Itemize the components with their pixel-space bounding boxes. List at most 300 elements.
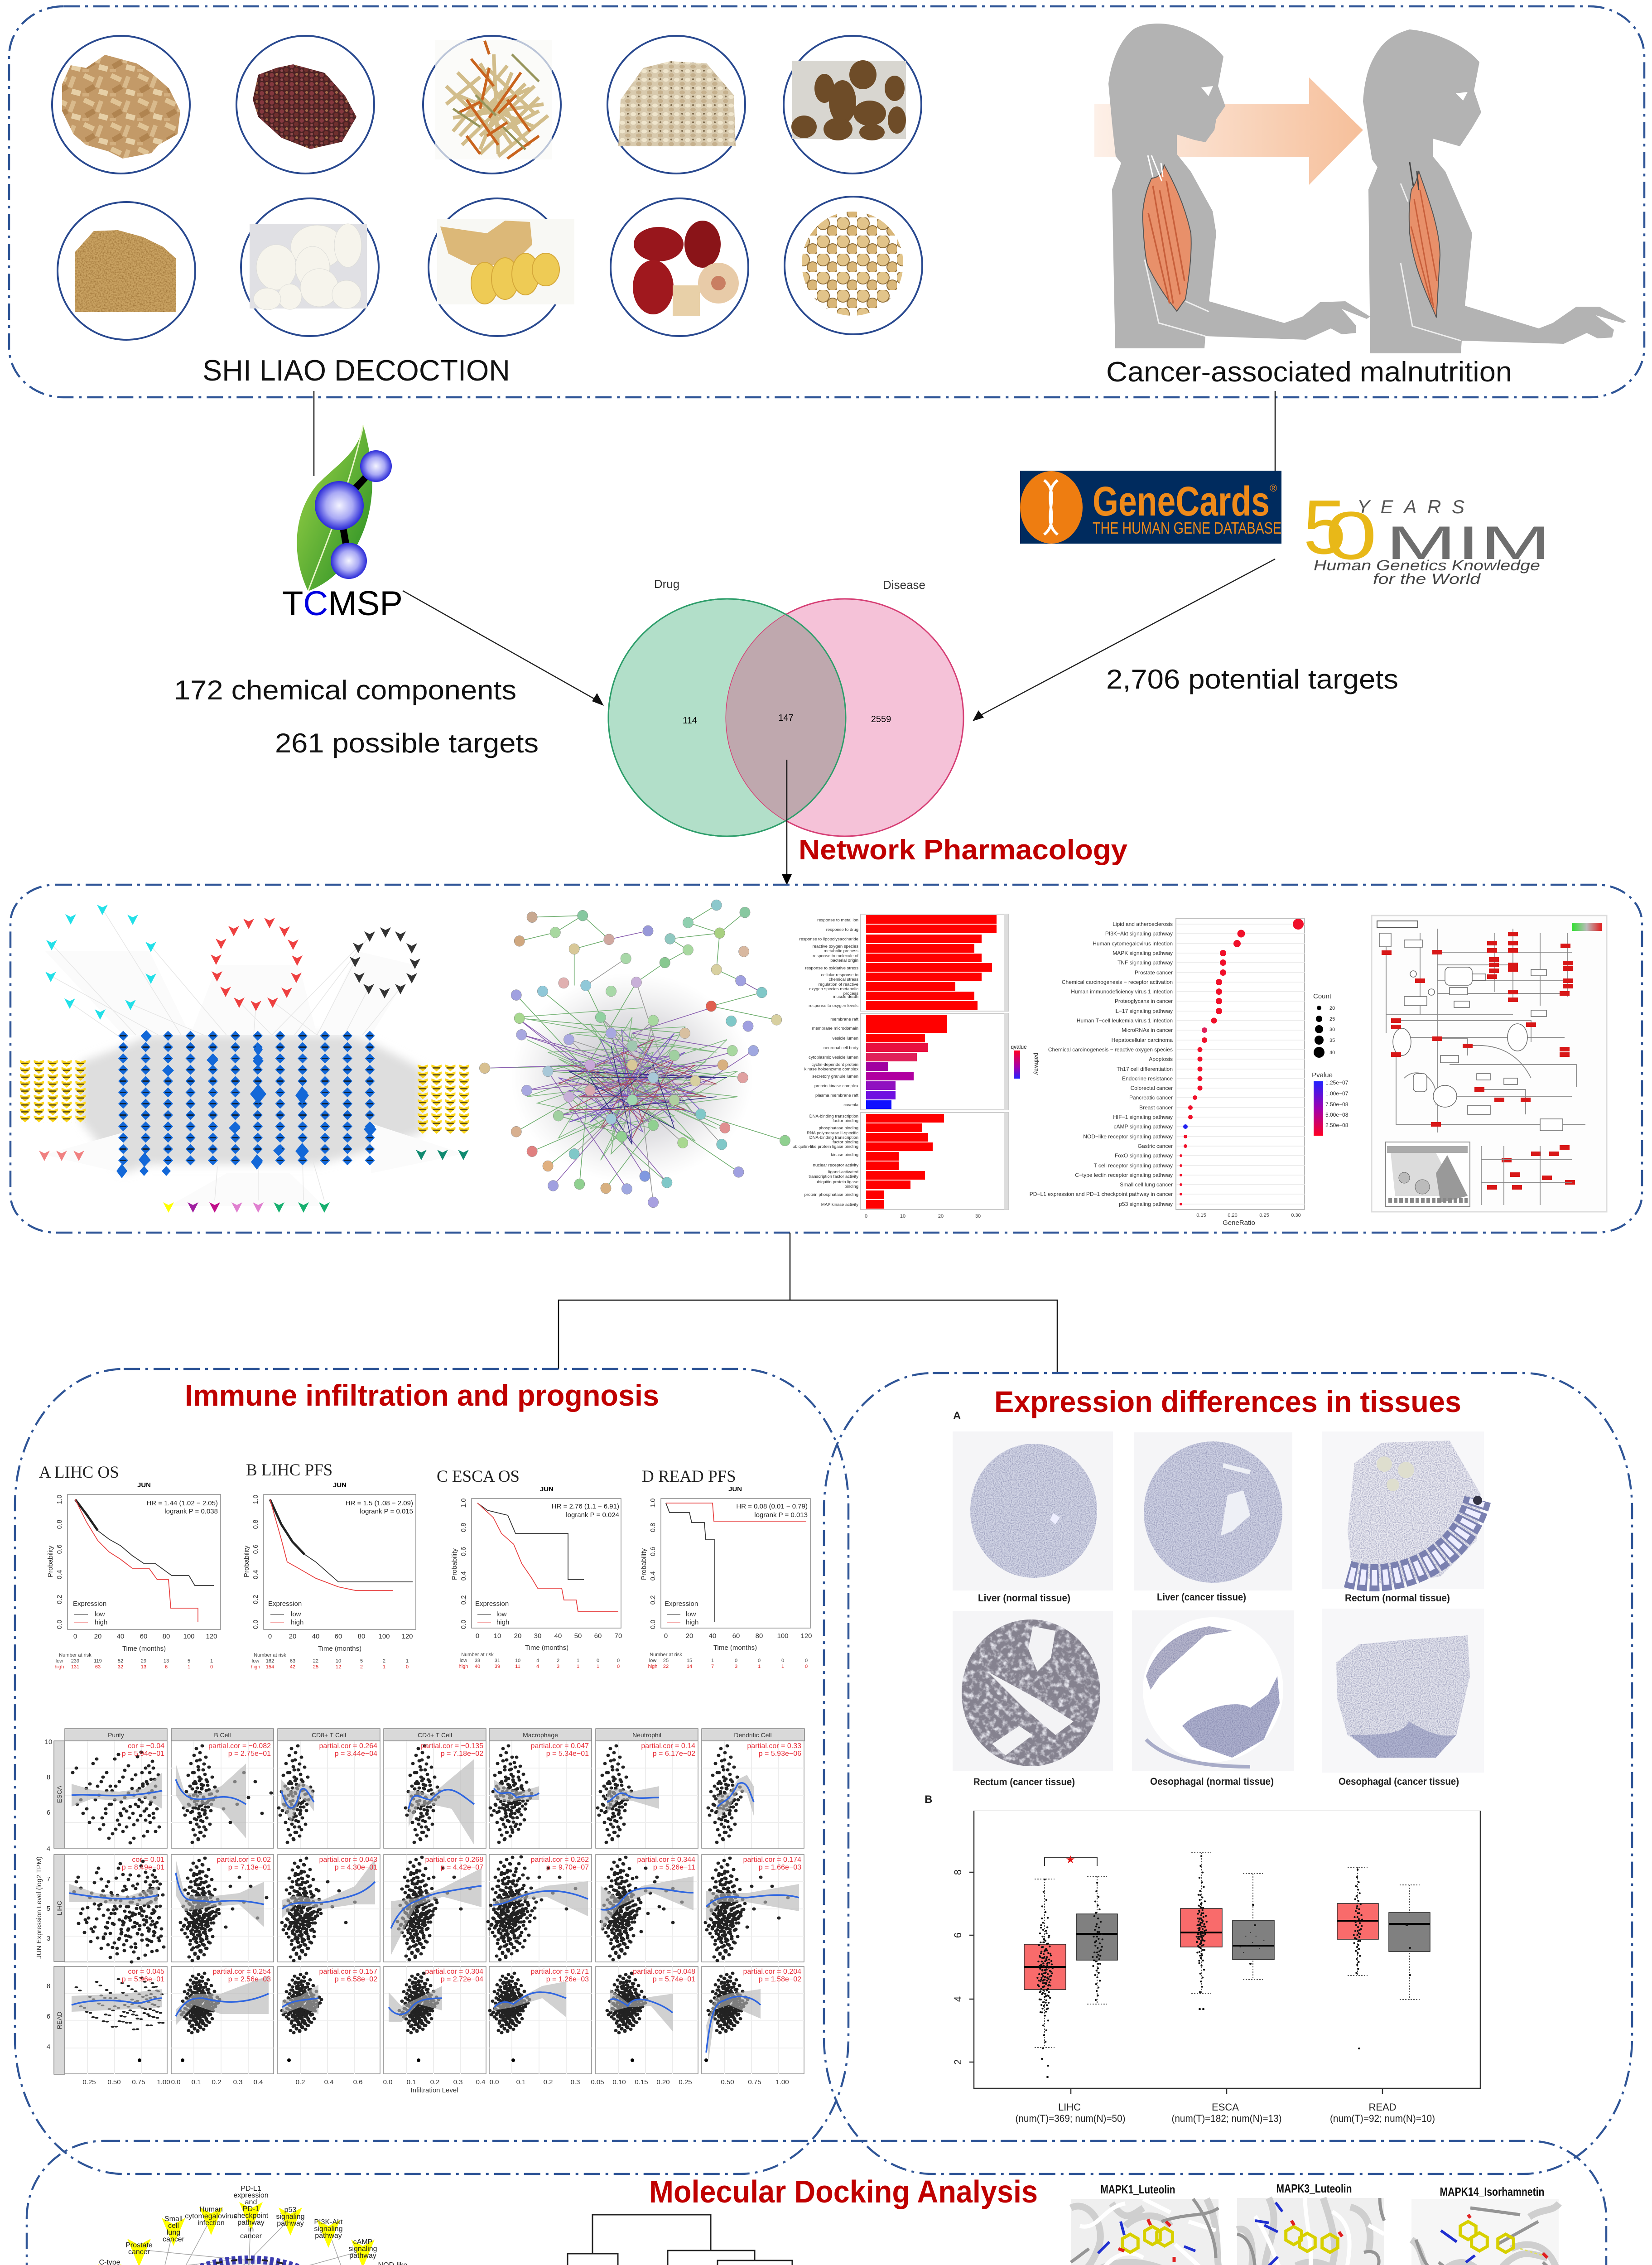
- caption: decoction: SHI LIAO DECOCTION: [202, 354, 510, 387]
- scatter axes: 0.15: [635, 2078, 648, 2086]
- arrow: muscle loss: [1094, 77, 1363, 185]
- survival plot C: Expression: [475, 1600, 509, 1608]
- row: READ: partial.cor = 0.157: [319, 1968, 377, 1976]
- row: LIHC: partial.cor = 0.344: [637, 1856, 695, 1864]
- survival plot B: 0.8: [252, 1520, 260, 1529]
- survival plot D: 0.4: [649, 1571, 657, 1581]
- row: LIHC: p = 4.30e−01: [335, 1864, 377, 1871]
- survival plot B: 0: [406, 1664, 409, 1670]
- survival plot D: 7: [711, 1664, 714, 1669]
- pathway: HCMV: Human: [199, 2206, 223, 2213]
- survival plot C: 40: [554, 1632, 562, 1640]
- scatter axes: 0.0: [383, 2078, 392, 2086]
- GO term labels: 10: [900, 1214, 905, 1219]
- row: READ: p = 6.58e−02: [335, 1976, 377, 1983]
- survival plot C: 4: [536, 1664, 539, 1669]
- survival plot A: 0.8: [56, 1520, 63, 1529]
- pathway: PD-L1: in: [248, 2226, 254, 2233]
- KEGG term labels: Breast cancer: [1139, 1104, 1173, 1111]
- KEGG term labels: Proteoglycans in cancer: [1115, 998, 1173, 1004]
- survival plot A: 6: [165, 1664, 168, 1670]
- pathway: small cell lung: Small: [164, 2215, 183, 2223]
- survival plot C: 0.0: [460, 1620, 467, 1629]
- KEGG term labels: Th17 cell differentiation: [1117, 1066, 1173, 1072]
- survival plot A: 0.4: [56, 1570, 63, 1579]
- survival plot B: 80: [358, 1633, 365, 1640]
- logo: OMIM 50 years: YEARS: [1357, 496, 1464, 517]
- row: LIHC: p = 1.66e−03: [759, 1864, 801, 1871]
- GO term labels: factor binding: [833, 1140, 858, 1145]
- row: ESCA: partial.cor = −0.082: [208, 1742, 271, 1750]
- immune correlation scatter grid: [35, 1729, 804, 2094]
- GO term labels: caveola: [843, 1103, 859, 1108]
- survival plot C: Number at risk: [461, 1652, 494, 1658]
- boxplot: 6: [952, 1932, 963, 1938]
- GO term labels: regulation of reactive: [819, 982, 858, 987]
- scatter axes: 0.1: [516, 2078, 525, 2086]
- survival plot A: 29: [141, 1658, 146, 1664]
- GO term labels: vesicle lumen: [832, 1036, 858, 1041]
- GO term labels: response to molecule of: [813, 954, 858, 959]
- survival plot B: 12: [336, 1664, 341, 1670]
- survival plot C: 50: [574, 1632, 582, 1640]
- column strips: [65, 1729, 804, 1741]
- text: possible targets: 261 possible targets: [275, 728, 539, 758]
- survival plot D: 25: [663, 1658, 669, 1663]
- GO term labels: secretory granule lumen: [812, 1074, 858, 1079]
- GO term labels: reactive oxygen species: [813, 944, 858, 949]
- scatter axes: 3: [47, 1935, 50, 1942]
- survival plot C: 0.6: [460, 1547, 467, 1556]
- row strips: ESCA: [56, 1785, 63, 1803]
- survival plot A: 52: [118, 1658, 123, 1664]
- row: LIHC: partial.cor = 0.043: [319, 1856, 377, 1864]
- KEGG term labels: T cell receptor signaling pathway: [1093, 1162, 1173, 1169]
- survival plot B: 5: [360, 1658, 363, 1664]
- caption: Rectum (cancer tissue): [973, 1776, 1075, 1788]
- survival plot C: 40: [475, 1664, 480, 1669]
- GO term labels: protein kinase complex: [814, 1084, 858, 1089]
- GO term labels: 20: [938, 1214, 944, 1219]
- survival plot D: 0.0: [649, 1620, 657, 1629]
- facet: biological process: [861, 914, 1008, 1011]
- pvalue legend: 7.50e−08: [1325, 1101, 1349, 1108]
- survival plot C: 39: [495, 1664, 500, 1669]
- survival plot B: 60: [335, 1633, 342, 1640]
- pathway: p53: pathway: [277, 2220, 304, 2227]
- compound nodes right: [416, 1065, 471, 1134]
- pathway: p53: [276, 2206, 305, 2236]
- row: READ: cor = 0.045: [128, 1968, 164, 1976]
- 3D pose: [1237, 2198, 1384, 2265]
- caption: Oesophagal (cancer tissue): [1339, 1776, 1459, 1787]
- panel: network pharmacology: [10, 885, 1642, 1233]
- GO legend: [1011, 1044, 1040, 1079]
- pathway: PI3K-Akt: pathway: [315, 2232, 342, 2240]
- survival plot D: low: [686, 1610, 696, 1618]
- row: LIHC: p = 9.70e−07: [546, 1864, 589, 1871]
- KEGG term labels: Hepatocellular carcinoma: [1112, 1037, 1173, 1043]
- row: READ: p = 2.72e−04: [441, 1976, 483, 1983]
- 3D pose: [1411, 2199, 1559, 2265]
- survival plot B: 0.0: [252, 1620, 260, 1629]
- scatter axes: 0.3: [453, 2078, 462, 2086]
- 3D pose: [1071, 2199, 1219, 2265]
- scatter axes: 4: [47, 1845, 50, 1853]
- scatter axes: 0.75: [132, 2078, 145, 2086]
- survival plot C: 60: [594, 1632, 602, 1640]
- logo: OMIM 50 years: Human Genetics Knowledge: [1314, 557, 1540, 573]
- survival plot D: high: [648, 1664, 657, 1669]
- survival plot C: high: [459, 1664, 468, 1669]
- scatter axes: 0.0: [490, 2078, 499, 2086]
- pathway: small cell lung: [162, 2215, 185, 2246]
- survival plot D: HR = 0.08 (0.01 − 0.79): [736, 1503, 808, 1510]
- pathway: PD-L1: [233, 2185, 269, 2240]
- scatter axes: 5: [47, 1905, 50, 1913]
- survival plot B: 120: [401, 1633, 413, 1640]
- count legend: 40: [1329, 1050, 1335, 1055]
- survival plot D: 20: [686, 1632, 693, 1640]
- row: ESCA: p = 5.94e−01: [122, 1750, 164, 1758]
- row: ESCA: partial.cor = −0.135: [421, 1742, 483, 1750]
- scatter axes: 0.25: [679, 2078, 692, 2086]
- row: READ: p = 5.74e−01: [653, 1976, 695, 1983]
- survival plot D: 0: [758, 1658, 761, 1663]
- survival plot B: Number at risk: [254, 1653, 286, 1658]
- KEGG term labels: PI3K−Akt signaling pathway: [1105, 930, 1173, 937]
- venn diagram: 2559: [871, 714, 891, 724]
- KEGG dots: [1180, 919, 1304, 1205]
- count legend: 30: [1329, 1027, 1335, 1032]
- GO term labels: membrane microdomain: [812, 1026, 858, 1031]
- pathway: PD-L1: PD-1: [243, 2205, 259, 2213]
- target diamond grid: [112, 1030, 381, 1166]
- survival plot D: [640, 1467, 812, 1669]
- KEGG term labels: TNF signaling pathway: [1117, 959, 1173, 966]
- logo: OMIM 50 years: 5: [1303, 484, 1346, 570]
- survival plot A: 20: [94, 1633, 101, 1640]
- GO term labels: ubiquitin protein ligase: [815, 1180, 858, 1185]
- survival plot B: [243, 1461, 416, 1670]
- docking: MAPK14 isorhamnetin: [1411, 2185, 1559, 2265]
- pvalue legend: [1312, 1071, 1349, 1136]
- survival plot B: high: [291, 1619, 303, 1626]
- GO term labels: 30: [975, 1214, 981, 1219]
- docking: MAPK3 luteolin: MAPK3_Luteolin: [1276, 2182, 1352, 2195]
- row: ESCA: partial.cor = 0.14: [641, 1742, 695, 1750]
- survival plot C: C ESCA OS: [437, 1467, 520, 1486]
- row: LIHC: p = 7.13e−01: [228, 1864, 271, 1871]
- caption: Oesophagal (normal tissue): [1150, 1776, 1274, 1787]
- facet: cellular component: [861, 1013, 1008, 1110]
- significance bracket: [1045, 1854, 1097, 1866]
- survival plot C: 0: [617, 1664, 620, 1669]
- boxplot: 4: [952, 1996, 963, 2002]
- KEGG term labels: NOD−like receptor signaling pathway: [1083, 1133, 1173, 1140]
- KEGG term labels: p53 signaling pathway: [1119, 1201, 1173, 1207]
- survival plot D: 120: [800, 1632, 812, 1640]
- survival plot C: low: [460, 1658, 467, 1663]
- KEGG term labels: Human immunodeficiency virus 1 infection: [1071, 988, 1173, 995]
- tissue: liver normal: [953, 1431, 1113, 1590]
- survival plot C: 0.8: [460, 1523, 467, 1532]
- pathway: p53: p53: [284, 2206, 296, 2214]
- survival plot C: 2: [557, 1658, 559, 1663]
- GO term labels: response to metal ion: [817, 918, 858, 923]
- GO term labels: oxygen species metabolic: [809, 987, 858, 992]
- pathway: small cell lung: cancer: [163, 2236, 185, 2243]
- survival plot A: 60: [140, 1633, 147, 1640]
- row: READ: [65, 1966, 804, 2074]
- logo: OMIM 50 years: 0: [1325, 497, 1377, 573]
- pathway: PI3K-Akt: PI3K-Akt: [314, 2218, 343, 2226]
- pathway: small cell lung: cell: [168, 2222, 179, 2230]
- KEGG term labels: Prostate cancer: [1135, 969, 1173, 976]
- survival plot D: low: [649, 1658, 656, 1663]
- x labels: (num(T)=92; num(N)=10): [1330, 2113, 1435, 2124]
- GO term labels: neuronal cell body: [824, 1046, 858, 1051]
- KEGG term labels: Pancreatic cancer: [1129, 1094, 1173, 1101]
- count legend: 20: [1329, 1006, 1335, 1011]
- row: READ: p = 1.58e−02: [759, 1976, 801, 1983]
- survival plot B: 0.6: [252, 1545, 260, 1554]
- compound target pathway network: [47, 2185, 455, 2265]
- row: ESCA: p = 7.18e−02: [441, 1750, 483, 1758]
- survival plot C: JUN: [540, 1485, 554, 1493]
- pathway: cAMP: [348, 2238, 377, 2265]
- scatter axes: 0.0: [171, 2078, 180, 2086]
- KEGG term labels: Chemical carcinogenesis − receptor activation: [1062, 979, 1173, 985]
- survival plot D: 1.0: [649, 1499, 657, 1508]
- GO term labels: kinase binding: [831, 1152, 858, 1157]
- count legend: 35: [1329, 1038, 1335, 1043]
- GO term labels: [793, 918, 981, 1219]
- herb 6: [58, 202, 195, 340]
- logo: GeneCards: ®: [1270, 482, 1277, 494]
- survival plot C: [437, 1467, 622, 1669]
- GO term labels: kinase holoenzyme complex: [804, 1067, 858, 1072]
- survival plot A: 32: [118, 1664, 123, 1670]
- survival plot D: Probability: [640, 1548, 648, 1580]
- scatter axes: 0.4: [254, 2078, 263, 2086]
- row strips: [54, 1741, 65, 2074]
- significance bracket: ★: [1065, 1854, 1075, 1866]
- heading: molecular docking: Molecular Docking Analysis: [649, 2174, 1038, 2209]
- survival plot C: 0.4: [460, 1571, 467, 1581]
- survival plot B: 100: [378, 1633, 390, 1640]
- pathway: cAMP: signaling: [348, 2245, 377, 2253]
- pathway: HCMV: cytomegalovirus: [185, 2212, 237, 2220]
- survival plot C: 4: [536, 1658, 539, 1663]
- row: LIHC: partial.cor = 0.174: [743, 1856, 801, 1864]
- row: READ: partial.cor = −0.048: [633, 1968, 695, 1976]
- survival plot A: 80: [163, 1633, 170, 1640]
- survival plot B: 1: [383, 1664, 385, 1670]
- row: ESCA: [65, 1741, 804, 1848]
- KEGG term labels: Colorectal cancer: [1131, 1085, 1173, 1091]
- survival plot C: 31: [495, 1658, 500, 1663]
- boxplot: 2: [952, 2059, 963, 2065]
- pathway: PD-L1: PD-L1: [241, 2185, 261, 2193]
- compound nodes left: [18, 1060, 87, 1123]
- survival plot B: 162: [266, 1658, 274, 1664]
- column strips: Dendritic Cell: [734, 1731, 772, 1739]
- row strips: LIHC: [56, 1901, 63, 1915]
- pvalue legend: Pvalue: [1312, 1071, 1333, 1079]
- survival plot A: high: [55, 1664, 64, 1670]
- READ boxes: [1337, 1867, 1430, 2000]
- survival plot B: 2: [383, 1658, 385, 1664]
- caption: Rectum (normal tissue): [1345, 1592, 1450, 1604]
- survival plot B: 10: [336, 1658, 341, 1664]
- scatter axes: 6: [47, 2013, 50, 2020]
- GO term labels: cyclin-dependent protein: [811, 1062, 858, 1067]
- compound-target network: [18, 905, 471, 1213]
- pvalue legend: 1.00e−07: [1325, 1090, 1349, 1097]
- scatter axes: 0.1: [407, 2078, 416, 2086]
- x labels: (num(T)=182; num(N)=13): [1171, 2113, 1282, 2124]
- logo: GeneCards: GeneCards: [1093, 478, 1270, 525]
- survival plot B: Time (months): [318, 1645, 361, 1653]
- x labels: LIHC: [1058, 2101, 1081, 2113]
- survival plot B: 63: [290, 1658, 295, 1664]
- row: READ: partial.cor = 0.271: [530, 1968, 589, 1976]
- GO term labels: ligand-activated: [828, 1170, 858, 1175]
- venn diagram: 147: [778, 713, 794, 723]
- pathway: PD-L1: expression: [233, 2192, 269, 2199]
- survival plot A: 0: [73, 1633, 77, 1640]
- KEGG term labels: Chemical carcinogenesis − reactive oxygen species: [1048, 1046, 1173, 1053]
- scatter axes: 8: [47, 1982, 50, 1990]
- row: LIHC: partial.cor = 0.268: [425, 1856, 483, 1864]
- survival plot C: 38: [475, 1658, 480, 1663]
- survival plot A: 120: [206, 1633, 217, 1640]
- herb 7: [241, 198, 379, 336]
- survival plot D: 60: [732, 1632, 740, 1640]
- survival plot C: HR = 2.76 (1.1 − 6.91): [552, 1503, 619, 1510]
- survival plot C: Probability: [451, 1548, 458, 1580]
- survival plot C: 70: [615, 1632, 622, 1640]
- survival plot D: Number at risk: [650, 1652, 682, 1658]
- survival plot A: Probability: [47, 1545, 54, 1577]
- survival plot C: high: [496, 1619, 509, 1626]
- arrow: TCMSP to venn: [403, 591, 604, 706]
- scatter axes: 0.3: [233, 2078, 242, 2086]
- scatter axes: 0.2: [296, 2078, 305, 2086]
- survival plot A: 119: [94, 1658, 102, 1664]
- survival plot D: 0: [805, 1658, 808, 1663]
- survival plot A: 239: [71, 1658, 79, 1664]
- scatter axes: 0.75: [748, 2078, 761, 2086]
- survival plot D: 14: [687, 1664, 692, 1669]
- x labels: ESCA: [1212, 2101, 1239, 2113]
- enlarged hub targets: [116, 1030, 376, 1178]
- GO term labels: 0: [865, 1214, 867, 1219]
- survival plot B: JUN: [333, 1481, 347, 1489]
- scatter axes: 6: [47, 1809, 50, 1817]
- survival plot C: 0.2: [460, 1595, 467, 1605]
- pvalue legend: 1.25e−07: [1325, 1079, 1349, 1086]
- survival plot B: 0.2: [252, 1595, 260, 1604]
- survival plot B: Expression: [268, 1600, 302, 1608]
- KEGG term labels: Lipid and atherosclerosis: [1113, 921, 1173, 927]
- survival plot D: 0: [781, 1658, 784, 1663]
- x labels: [1016, 2101, 1435, 2124]
- survival plot C: logrank P = 0.024: [566, 1511, 619, 1519]
- row: LIHC: partial.cor = 0.262: [530, 1856, 589, 1864]
- pathway: PD-L1: pathway: [237, 2219, 265, 2226]
- docking heatmap: [485, 2215, 1044, 2265]
- ESCA boxes: [1180, 1853, 1274, 1994]
- connector tree: network to two panels: [559, 1233, 1057, 1373]
- row: LIHC: p = 5.26e−11: [653, 1864, 695, 1871]
- KEGG axis: 0.25: [1259, 1213, 1269, 1218]
- pathway: prostate: Prostate: [125, 2241, 153, 2249]
- column dendrogram: [568, 2215, 817, 2265]
- survival plot D: logrank P = 0.013: [754, 1511, 808, 1519]
- column strips: B Cell: [214, 1731, 231, 1739]
- survival plot D: 80: [756, 1632, 763, 1640]
- caption: Liver (normal tissue): [978, 1592, 1070, 1604]
- tissue: oesophagal cancer: [1322, 1609, 1484, 1773]
- KEGG pathway map: [1372, 916, 1607, 1212]
- tissue: liver cancer: [1134, 1432, 1292, 1590]
- survival plot C: 10: [494, 1632, 501, 1640]
- survival plot A: 0.0: [56, 1620, 63, 1629]
- survival plot A: HR = 1.44 (1.02 − 2.05): [146, 1499, 218, 1507]
- logo: OMIM 50 years: [1303, 484, 1551, 587]
- GO term labels: chemical stress: [829, 977, 858, 982]
- survival plot D: 1: [758, 1664, 761, 1669]
- pathway: cAMP: pathway: [349, 2252, 376, 2260]
- scatter axes: 7: [47, 1875, 50, 1883]
- survival plot D: Expression: [665, 1600, 698, 1608]
- pathway: small cell lung: lung: [167, 2229, 180, 2236]
- KEGG dot plot: [1030, 918, 1349, 1227]
- pathway: HCMV: [185, 2206, 237, 2235]
- survival plot C: 0: [476, 1632, 479, 1640]
- pathway: PD-L1: and: [245, 2198, 257, 2206]
- survival plot C: 20: [514, 1632, 521, 1640]
- connector: decoction to TCMSP: [313, 391, 314, 476]
- scatter axes: [35, 1738, 789, 2094]
- highlighted genes: [1382, 932, 1575, 1190]
- KEGG term labels: IL−17 signaling pathway: [1114, 1008, 1173, 1014]
- survival plot D: 1: [711, 1658, 714, 1663]
- GO term labels: binding: [844, 1184, 858, 1189]
- GO term labels: protein phosphatase binding: [804, 1192, 858, 1197]
- scatter axes: 0.50: [107, 2078, 121, 2086]
- colour key: [1572, 923, 1602, 931]
- black nodes: [350, 927, 420, 998]
- survival plot A: 1.0: [56, 1495, 63, 1504]
- GO term labels: response to oxidative stress: [805, 966, 858, 971]
- row: ESCA: p = 2.75e−01: [228, 1750, 271, 1758]
- docking: MAPK1 luteolin: [1071, 2183, 1219, 2265]
- text: chemical components: 172 chemical components: [174, 675, 516, 705]
- survival plot A: 100: [183, 1633, 195, 1640]
- KEGG term labels: Gastric cancer: [1138, 1143, 1173, 1149]
- row: ESCA: partial.cor = 0.264: [319, 1742, 377, 1750]
- KEGG axis: 0.30: [1291, 1213, 1301, 1218]
- survival plot D: 1: [781, 1664, 784, 1669]
- protein interaction network: [479, 900, 790, 1208]
- venn diagram: 114: [683, 716, 697, 726]
- scatter axes: 0.4: [324, 2078, 333, 2086]
- scatter axes: 0.4: [476, 2078, 485, 2086]
- scatter axes: 4: [47, 2043, 50, 2051]
